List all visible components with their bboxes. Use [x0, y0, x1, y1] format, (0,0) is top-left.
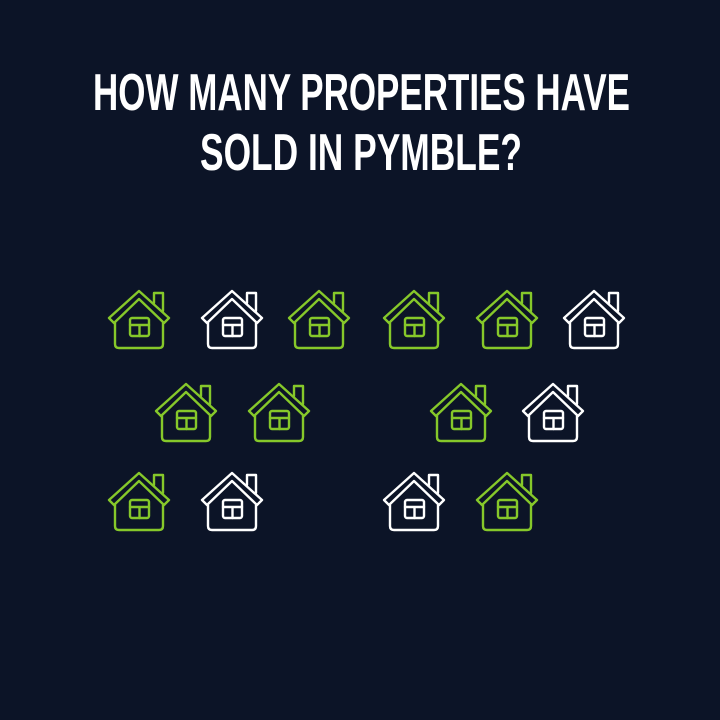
- icon: house row2 1: [156, 384, 216, 441]
- title: [93, 64, 630, 182]
- icon: house row2 2: [249, 384, 309, 441]
- icon: house row3 2: [202, 473, 262, 530]
- icon: house row1 3: [289, 291, 349, 348]
- icon: house row1 4: [384, 291, 444, 348]
- icon: house row1 5: [477, 291, 537, 348]
- icon: house row3 4: [477, 473, 537, 530]
- icon: house row2 3: [431, 384, 491, 441]
- title: SOLD IN PYMBLE?: [200, 124, 522, 182]
- icon: house row1 2: [202, 291, 262, 348]
- icon: house row3 3: [384, 473, 444, 530]
- icon: house row1 1: [109, 291, 169, 348]
- icon: house row1 6: [564, 291, 624, 348]
- house icons grid: [109, 291, 624, 530]
- icon: house row3 1: [109, 473, 169, 530]
- icon: house row2 4: [523, 384, 583, 441]
